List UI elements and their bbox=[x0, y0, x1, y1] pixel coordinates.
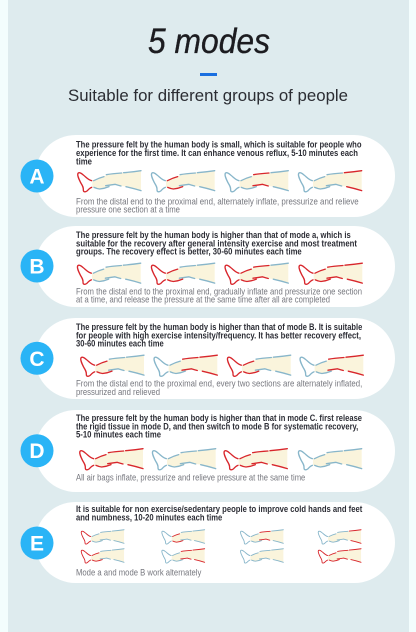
badge B: B bbox=[29, 256, 45, 278]
note A: pressure one section at a time bbox=[76, 205, 180, 215]
panel: mode A bbox=[20, 135, 395, 217]
description D: 5-10 minutes each time bbox=[76, 430, 161, 440]
description C bbox=[76, 322, 362, 349]
note C: From the distal end to the proximal end, every two sections are alternately inflated, bbox=[76, 379, 362, 389]
badge C: C bbox=[29, 348, 45, 371]
description B: groups. The recovery effect is better, 30-60 minutes each time bbox=[76, 247, 302, 257]
badge D bbox=[20, 434, 54, 467]
description B: suitable for the recovery after general intensity exercise and most treatment bbox=[76, 238, 357, 248]
subtitle: Suitable for different groups of people bbox=[68, 86, 348, 105]
leg diagrams B bbox=[77, 263, 362, 284]
badge A: A bbox=[29, 166, 45, 188]
description A bbox=[76, 140, 362, 166]
description D bbox=[76, 413, 362, 440]
note E: Mode a and mode B work alternately bbox=[76, 567, 202, 577]
note C: pressurized and relieved bbox=[76, 387, 160, 397]
description B bbox=[76, 230, 357, 257]
badge B bbox=[20, 250, 54, 282]
accent bar bbox=[200, 73, 217, 76]
description C: for people with high exercise intensity/frequency. It has better recovery effect, bbox=[76, 330, 361, 340]
description E: It is suitable for non exercise/sedentary people to improve cold hands and feet bbox=[76, 504, 362, 514]
description A: The pressure felt by the human body is small, which is suitable for people who bbox=[76, 140, 362, 150]
leg diagrams D bbox=[80, 449, 362, 470]
note D: All air bags inflate, pressurize and relieve pressure at the same time bbox=[76, 472, 305, 482]
description C: The pressure felt by the human body is higher than that of mode B. It is suitable bbox=[76, 322, 362, 332]
leg diagrams A bbox=[78, 171, 362, 192]
note B: at a time, and release the pressure at the same time after all are completed bbox=[76, 295, 330, 305]
badge A bbox=[20, 160, 54, 192]
badge C bbox=[20, 342, 54, 375]
description A: experience for the first time. It can enhance venous reflux, 5-10 minutes each bbox=[76, 148, 358, 158]
panel: mode C bbox=[20, 318, 395, 399]
note B bbox=[76, 286, 362, 305]
note A bbox=[76, 197, 359, 215]
leg diagrams E bbox=[81, 530, 361, 563]
description C: 30-60 minutes each time bbox=[76, 339, 164, 349]
title: 5 modes bbox=[148, 22, 270, 61]
badge E bbox=[20, 526, 54, 560]
leg diagrams C bbox=[81, 355, 363, 376]
description D: The pressure felt by the human body is higher than that in mode C. first release bbox=[76, 413, 362, 423]
badge D: D bbox=[29, 440, 45, 463]
note C bbox=[76, 379, 362, 397]
panel: mode D bbox=[20, 410, 395, 492]
badge E: E bbox=[30, 532, 44, 556]
note A: From the distal end to the proximal end, alternately inflate, pressurize and relieve bbox=[76, 197, 359, 207]
note B: From the distal end to the proximal end, gradually inflate and pressurize one section bbox=[76, 286, 362, 296]
description A: time bbox=[76, 156, 92, 166]
panel: mode E bbox=[20, 502, 395, 583]
panel: mode B bbox=[20, 226, 395, 307]
description E bbox=[76, 504, 362, 522]
description E: and numbness, 10-20 minutes each time bbox=[76, 512, 222, 522]
description D: the rigid tissue in mode D, and then switch to mode B for systematic recovery, bbox=[76, 421, 358, 431]
description B: The pressure felt by the human body is higher than that of mode a, which is bbox=[76, 230, 351, 240]
